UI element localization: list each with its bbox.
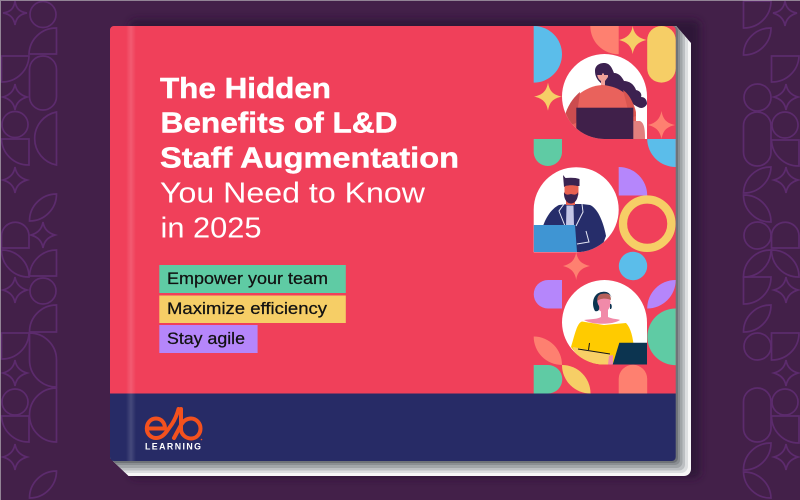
book page edges	[110, 26, 691, 476]
tag: maximize efficiency: Maximize efficiency	[167, 299, 328, 318]
right sleeve	[623, 90, 636, 118]
title	[160, 73, 459, 244]
logo wordmark: LEARNING	[145, 441, 201, 451]
navy suit	[543, 204, 606, 252]
blue laptop	[534, 225, 577, 252]
logo: elb learning	[145, 409, 202, 451]
portrait: woman with glasses at laptop	[562, 54, 647, 139]
face and neck	[597, 74, 608, 86]
hand	[608, 355, 613, 364]
title: You Need to Know	[160, 177, 426, 209]
cover navy footer band	[110, 394, 676, 461]
registered dot	[201, 439, 202, 440]
headset	[593, 292, 612, 311]
cover red field	[110, 26, 676, 394]
suit lapel lines	[559, 204, 589, 244]
tag: stay agile: Stay agile	[167, 329, 245, 348]
spine highlight	[126, 26, 136, 461]
hair top	[597, 292, 611, 301]
beard	[564, 192, 578, 204]
title: Staff Augmentation	[160, 142, 459, 174]
long wavy hair	[595, 63, 647, 108]
portrait: woman with headset	[562, 280, 647, 365]
book drop shadow	[130, 20, 700, 478]
left background pattern	[1, 1, 57, 498]
right background pattern	[743, 1, 799, 498]
left sleeve	[566, 92, 580, 125]
yellow sweater	[571, 322, 634, 365]
portrait: bearded man in suit	[533, 167, 619, 253]
orange body	[565, 85, 636, 139]
title: Benefits of L&D	[160, 108, 398, 140]
tag: maximize efficiency	[159, 296, 346, 323]
tablet and stylus	[578, 343, 610, 354]
decorative geometric shapes	[534, 26, 676, 394]
title: The Hidden	[160, 73, 331, 105]
laptop	[613, 343, 647, 364]
glasses	[596, 72, 608, 75]
neckline and neck	[584, 309, 620, 324]
logo mark	[147, 409, 200, 438]
book cover	[110, 26, 676, 461]
tag: stay agile	[159, 325, 258, 353]
title: in 2025	[160, 212, 262, 244]
tie and shirt	[566, 206, 574, 227]
lower body	[573, 347, 612, 365]
face	[597, 298, 610, 312]
laptop	[576, 108, 633, 139]
arm	[633, 121, 645, 139]
tag: empower your team: Empower your team	[167, 269, 328, 288]
tag: empower your team	[159, 265, 346, 293]
hair	[563, 175, 580, 187]
face	[564, 185, 578, 196]
neck	[566, 200, 575, 205]
